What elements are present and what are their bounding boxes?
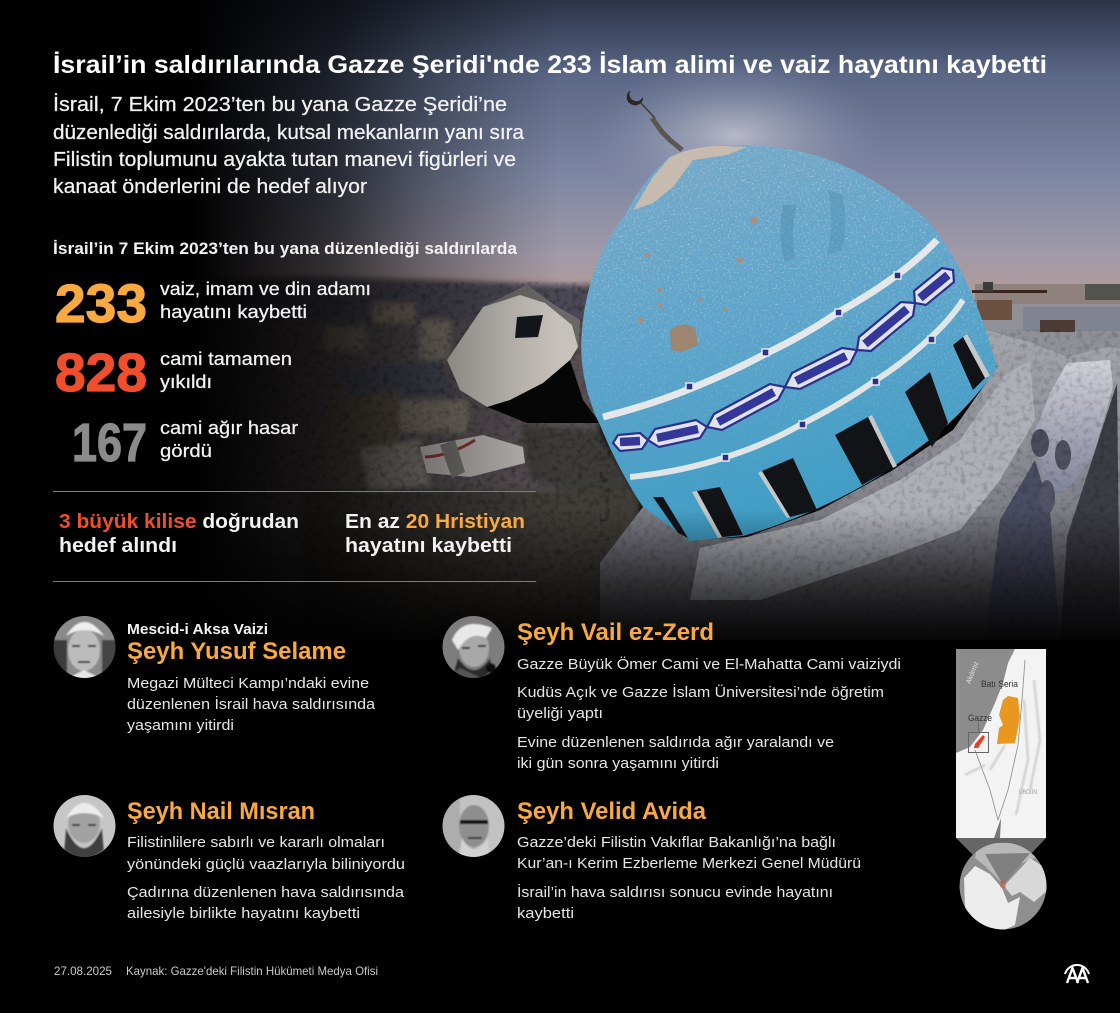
callout: Christians: hayatını kaybetti: [345, 535, 512, 557]
bio: Velid Avida: Gazze’deki Filistin Vakıflar Bakanlığı’na bağlı: [517, 834, 836, 851]
profile: Nail Mısran: [50, 792, 405, 922]
bio: Vail ez-Zerd: Kudüs Açık ve Gazze İslam Üniversitesi’nde öğretim: [517, 683, 884, 701]
large slab of rubble: [447, 285, 600, 423]
cartouche band: [613, 268, 954, 451]
finial and crescent: [627, 91, 682, 150]
map panel: Gaza and West Bank: ÜRDÜN: [1019, 789, 1037, 796]
bio: Yusuf Selame: düzenlenen İsrail hava saldırısında: [127, 695, 376, 713]
stat: 233 killed: hayatını kaybetti: [160, 302, 307, 322]
title: İsrail’in saldırılarında Gazze Şeridi'nde 233 İslam alimi ve vaiz hayatını kaybetti: [53, 51, 1047, 79]
stat: 828 destroyed: [55, 343, 292, 403]
portrait: Velid Avida: [442, 795, 504, 857]
stat: 828 destroyed: yıkıldı: [160, 372, 212, 392]
profile: Vail ez-Zerd: [440, 612, 901, 772]
portrait: Nail Mısran: [54, 795, 116, 857]
map panel: Gaza and West Bank: Akdeniz: [965, 660, 981, 685]
intro paragraph: [53, 93, 525, 198]
map panel: Gaza and West Bank: [956, 649, 1046, 838]
stat: 828 destroyed: cami tamamen: [160, 349, 292, 369]
portrait: Yusuf Selame: [54, 616, 116, 678]
statistics subheading: İsrail’in 7 Ekim 2023’ten bu yana düzenlediği saldırılarda: [53, 239, 518, 258]
connector between map and globe: [956, 838, 1046, 855]
background photo: bombed mosque dome: [212, 0, 1120, 638]
callout: churches: 3 büyük kilise doğrudan: [59, 511, 299, 533]
profile: Yusuf Selame: [50, 612, 376, 734]
profile: Velid Avida: [440, 792, 861, 922]
name: Şeyh Velid Avida: Şeyh Velid Avida: [517, 798, 707, 825]
ruined city behind the dome: [150, 276, 640, 645]
building at far right: [972, 282, 1120, 364]
bio: Nail Mısran: yönündeki güçlü vaazlarıyla biliniyordu: [127, 856, 405, 873]
bio: Velid Avida: İsrail’in hava saldırısı sonucu evinde hayatını: [517, 883, 833, 901]
source: Kaynak: Gazze'deki Filistin Hükümeti Medya Ofisi: [126, 964, 378, 978]
stat: 167 damaged: cami ağır hasar: [160, 418, 298, 438]
name: Şeyh Yusuf Selame: Şeyh Yusuf Selame: [127, 638, 346, 665]
callout: churches: [59, 511, 299, 557]
bio: Yusuf Selame: [127, 675, 376, 734]
stat: 828 destroyed: 828: [55, 343, 147, 403]
bio: Yusuf Selame: Megazi Mülteci Kampı’ndaki evine: [127, 675, 369, 692]
stat: 233 killed: [55, 274, 371, 334]
bio: Velid Avida: [517, 834, 861, 922]
dome: [575, 140, 1005, 550]
stat: 167 damaged: [72, 413, 298, 473]
bio: Nail Mısran: [127, 834, 405, 922]
icon: Anadolu Agency logo: [1065, 965, 1089, 983]
intro paragraph: düzenlediği saldırılarda, kutsal mekanların yanı sıra: [53, 122, 525, 144]
bio: Nail Mısran: Çadırına düzenlenen hava saldırısında: [127, 884, 405, 901]
map panel: Gaza and West Bank: Batı Şeria: [981, 679, 1018, 689]
map panel: Gaza and West Bank: Gazze: [968, 713, 992, 723]
callout: Christians: [345, 511, 525, 557]
bio: Velid Avida: Kur’an-ı Kerim Ezberleme Merkezi Genel Müdürü: [517, 855, 861, 872]
white stripes: [603, 240, 937, 417]
intro paragraph: kanaat önderlerini de hedef alıyor: [53, 176, 367, 198]
locator map: [956, 649, 1048, 932]
label: Mescid-i Aksa Vaizi: Mescid-i Aksa Vaizi: [127, 621, 268, 638]
white debris with red marks: [420, 435, 525, 478]
bio: Velid Avida: kaybetti: [517, 905, 574, 922]
globe: [960, 842, 1048, 932]
callout: Christians: En az 20 Hristiyan: [345, 511, 525, 533]
callout: churches: hedef alındı: [59, 535, 177, 557]
bio: Vail ez-Zerd: Gazze Büyük Ömer Cami ve El-Mahatta Cami vaiziydi: [517, 655, 901, 673]
portrait: Vail ez-Zerd: [442, 616, 504, 678]
bio: Nail Mısran: ailesiyle birlikte hayatını kaybetti: [127, 905, 360, 922]
stat: 233 killed: vaiz, imam ve din adamı: [160, 279, 371, 299]
bio: Vail ez-Zerd: iki gün sonra yaşamını yitirdi: [517, 755, 719, 772]
stat: 167 damaged: 167: [72, 413, 147, 473]
bio: Vail ez-Zerd: üyeliği yaptı: [517, 705, 603, 722]
rubble under the dome: [600, 330, 1120, 645]
name: Şeyh Vail ez-Zerd: Şeyh Vail ez-Zerd: [517, 619, 714, 646]
dome windows: [653, 334, 990, 538]
date: 27.08.2025: [54, 964, 112, 978]
bio: Vail ez-Zerd: [517, 655, 901, 772]
bio: Yusuf Selame: yaşamını yitirdi: [127, 717, 234, 734]
bio: Vail ez-Zerd: Evine düzenlenen saldırıda ağır yaralandı ve: [517, 734, 834, 751]
intro paragraph: Filistin toplumunu ayakta tutan manevi figürleri ve: [53, 149, 516, 171]
intro paragraph: İsrail, 7 Ekim 2023’ten bu yana Gazze Şeridi’ne: [53, 93, 507, 116]
name: Şeyh Nail Mısran: Şeyh Nail Mısran: [127, 798, 315, 825]
stat: 233 killed: 233: [55, 274, 147, 334]
stat: 167 damaged: gördü: [160, 441, 212, 461]
bio: Nail Mısran: Filistinlilere sabırlı ve kararlı olmaları: [127, 834, 385, 851]
